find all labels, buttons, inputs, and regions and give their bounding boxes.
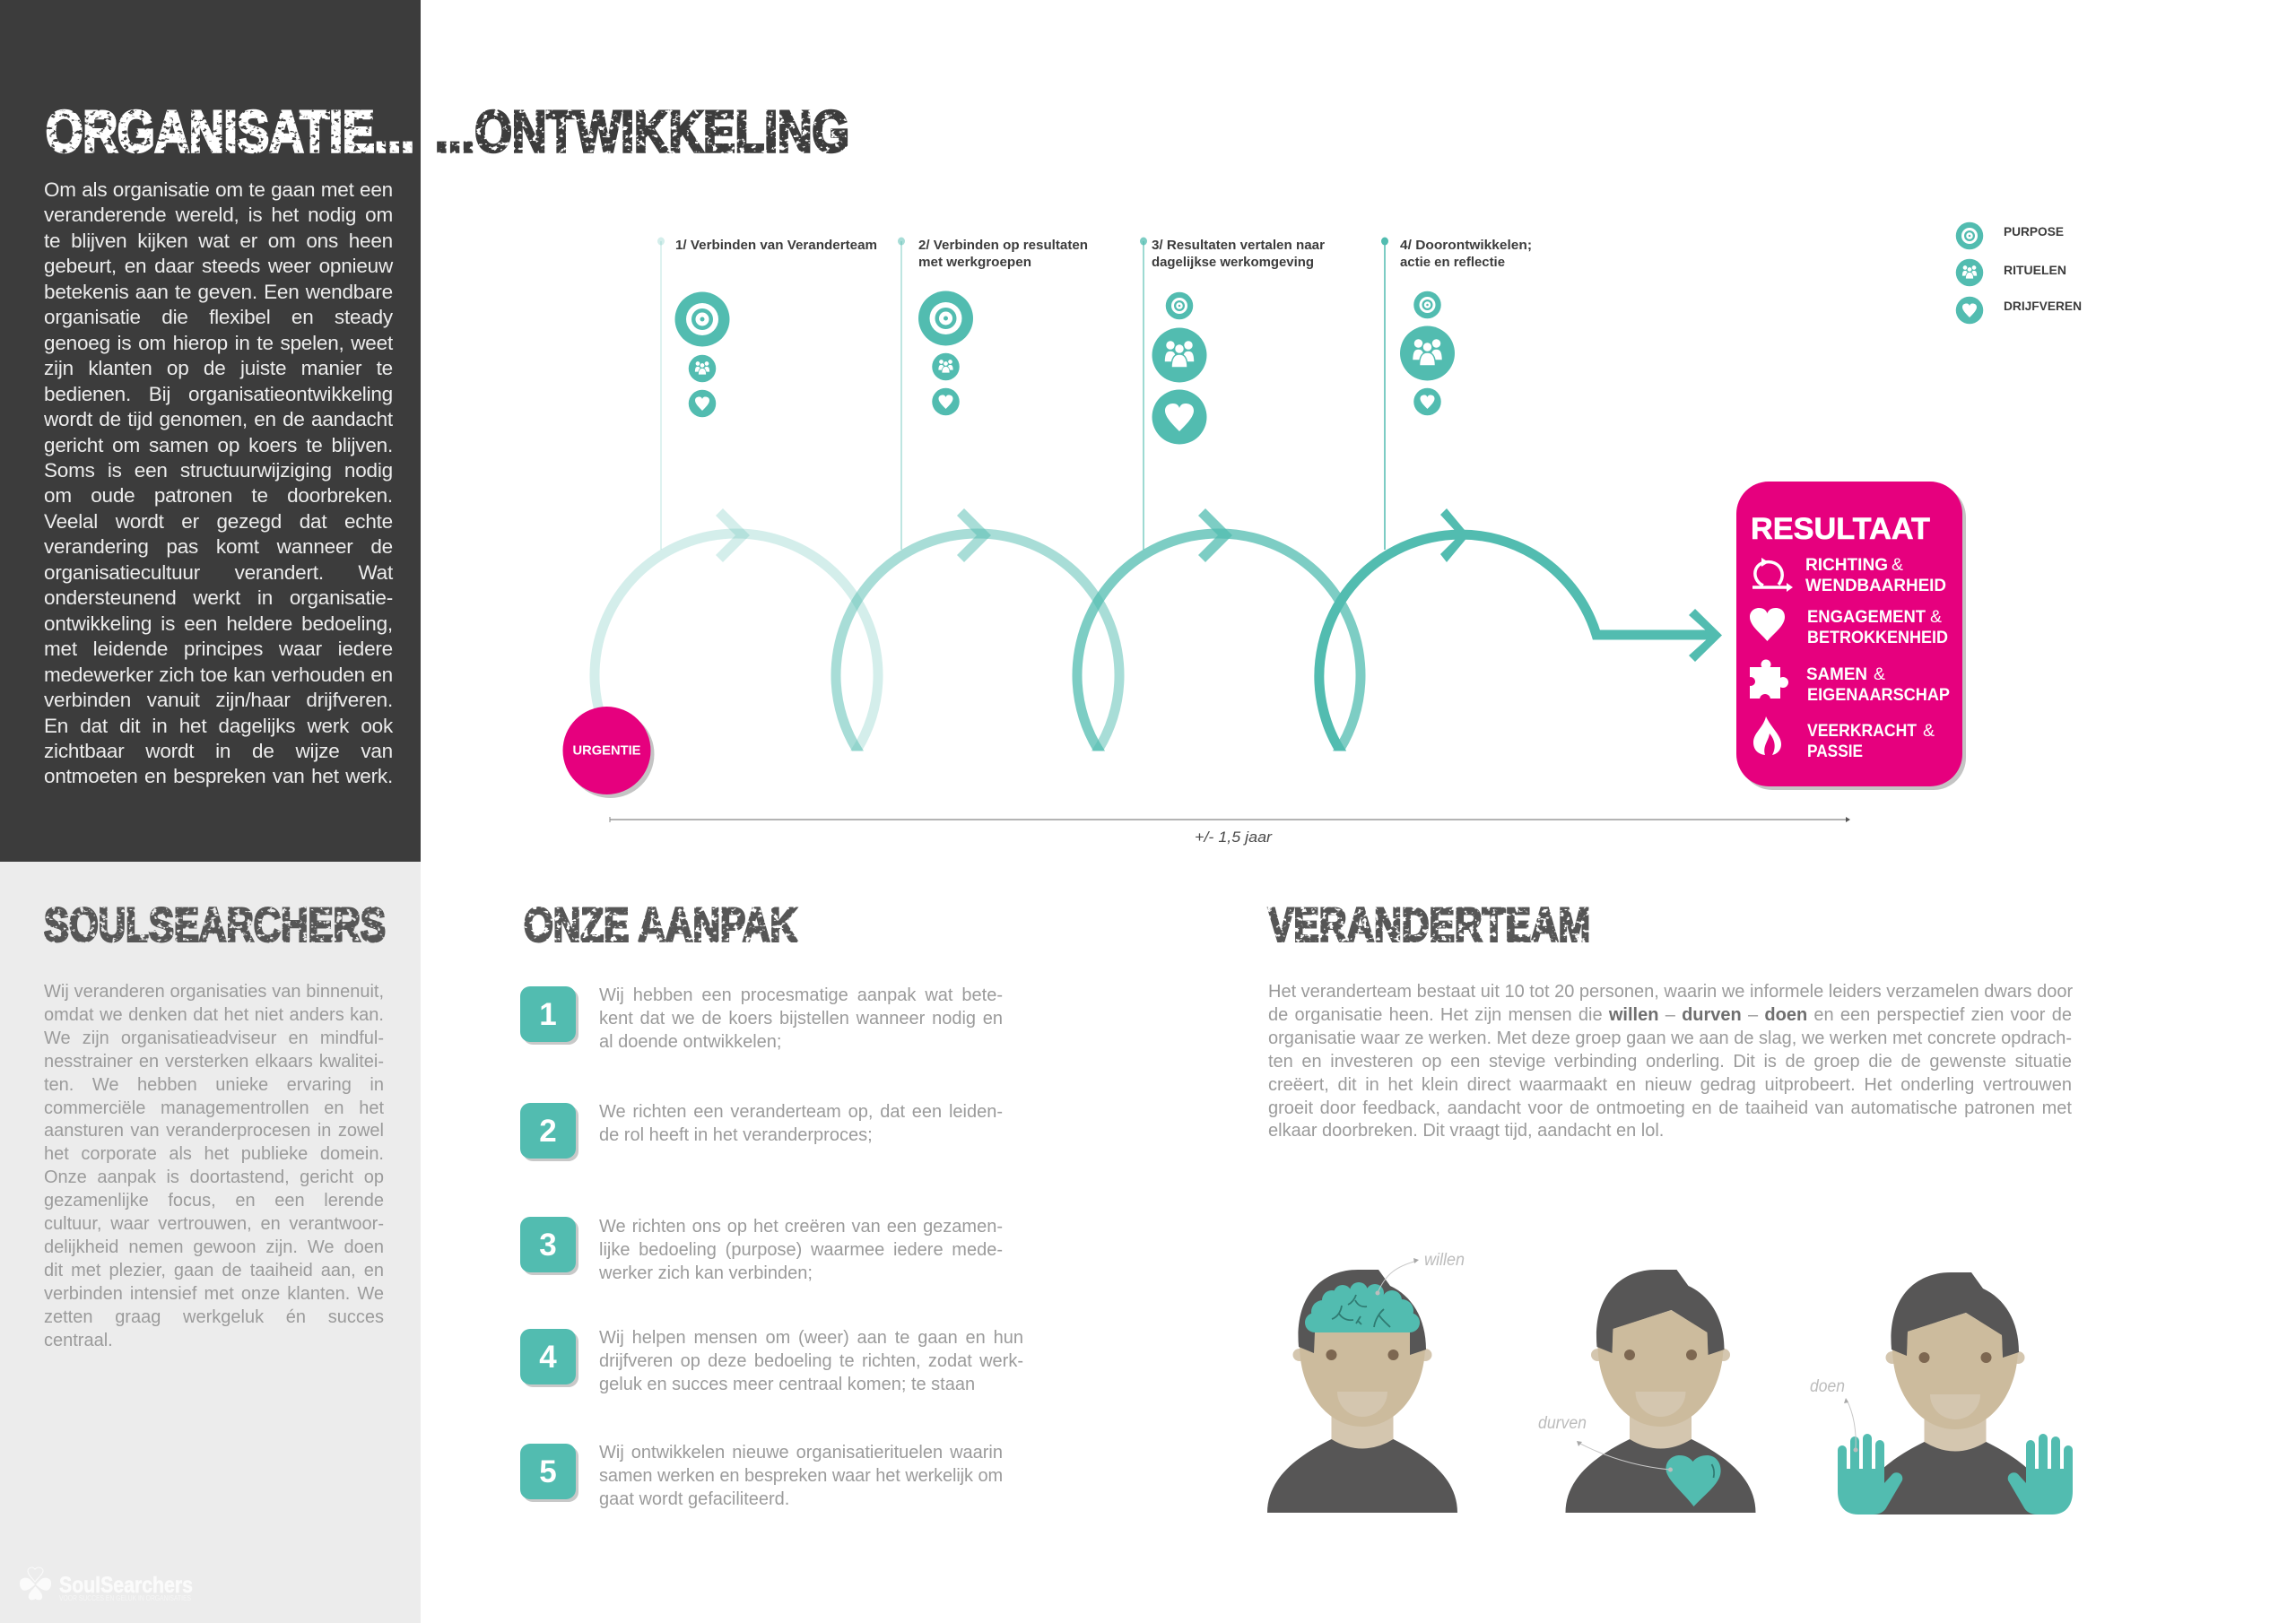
timeline axis: +/- 1,5 jaar bbox=[1195, 829, 1273, 846]
result: engagement: BETROKKENHEID bbox=[1807, 628, 1948, 647]
step labels: 2/ Verbinden op resultaten bbox=[918, 238, 1088, 253]
text: soulsearchers paragraph: zetten graag werkgeluk én succes bbox=[44, 1307, 384, 1327]
urgentie badge: URGENTIE bbox=[572, 742, 640, 759]
heading: VERANDERTEAM: VERANDERTEAM bbox=[1268, 898, 1590, 952]
step labels: 1/ Verbinden van Veranderteam bbox=[675, 238, 877, 253]
loop 4 with exit arrow bbox=[1319, 508, 1722, 762]
text: soulsearchers paragraph: verbinden intensief met onze klanten. We bbox=[44, 1284, 384, 1304]
text: intro paragraph: organisatie die flexibel en steady bbox=[44, 306, 393, 328]
text: intro paragraph: organisatiecultuur verandert. Wat bbox=[44, 561, 393, 584]
text: aanpak step 1 bbox=[599, 985, 1003, 1052]
number badge 5 bbox=[520, 1444, 578, 1502]
step 1: timeline marker bbox=[657, 237, 665, 550]
number badge 5: 5 bbox=[539, 1454, 557, 1489]
legend: PURPOSE bbox=[2004, 224, 2064, 239]
text: aanpak step 5: samen werken en bespreken waar het werkelijk om bbox=[599, 1466, 1003, 1486]
legend: DRIJFVEREN bbox=[2004, 299, 2082, 313]
result: samen: & bbox=[1874, 665, 1885, 684]
step labels bbox=[675, 238, 1532, 270]
number badge 1: 1 bbox=[539, 997, 557, 1032]
text: intro paragraph: gericht om samen op koers te blijven. bbox=[44, 434, 393, 456]
left hand bbox=[1838, 1434, 1902, 1515]
person 3: doen (hands) bbox=[1860, 1272, 2050, 1515]
loop 2 bbox=[836, 508, 1119, 762]
annotation: durven: durven bbox=[1538, 1414, 1587, 1433]
result: richting: WENDBAARHEID bbox=[1805, 576, 1946, 595]
text: veranderteam paragraph: groeit door feedback, aandacht voor de ontmoeting en de taaiheid van automatische patronen met bbox=[1268, 1098, 2072, 1118]
clover icon bbox=[20, 1567, 51, 1600]
text: aanpak step 3: werker zich kan verbinden; bbox=[599, 1263, 813, 1283]
result: veerkracht: PASSIE bbox=[1807, 742, 1863, 761]
icons: step 3 bbox=[1152, 292, 1207, 445]
text: intro paragraph: ontmoeten en bespreken van het werk. bbox=[44, 765, 393, 787]
text: intro paragraph: Veelal wordt er gezegd dat echte bbox=[44, 510, 393, 533]
text: intro paragraph: zichtbaar wordt in de wijze van bbox=[44, 740, 393, 762]
text: aanpak step 3 bbox=[599, 1217, 1003, 1283]
step 3: timeline marker bbox=[1140, 237, 1147, 550]
step labels: dagelijkse werkomgeving bbox=[1152, 255, 1314, 270]
step labels: 4/ Doorontwikkelen; bbox=[1400, 238, 1532, 253]
heart bbox=[1666, 1455, 1721, 1506]
icons: step 2 bbox=[918, 291, 973, 415]
text: veranderteam paragraph: de organisatie heen. Het zijn mensen die willen – durven – doen en een perspectief zien voor de bbox=[1268, 1005, 2072, 1025]
text: aanpak step 3: We richten ons op het creëren van een gezamen- bbox=[599, 1217, 1003, 1237]
text: intro paragraph: om oude patronen te doorbreken. bbox=[44, 484, 393, 507]
text: soulsearchers paragraph: commerciële managementrollen en het bbox=[44, 1098, 384, 1118]
urgentie badge bbox=[563, 707, 655, 798]
heading: ONZE AANPAK: ONZE AANPAK bbox=[524, 898, 797, 952]
text: intro paragraph: verbinden vanuit zijn/haar drijfveren. bbox=[44, 689, 393, 711]
text: intro paragraph: met leidende principes waar iedere bbox=[44, 638, 393, 660]
text: soulsearchers paragraph: dit met plezier, gaan de taaiheid aan, en bbox=[44, 1261, 384, 1280]
text: intro paragraph: medewerker zich toe kan verhouden en bbox=[44, 664, 393, 686]
text: intro paragraph: ondersteunend werkt in organisatie- bbox=[44, 586, 393, 609]
text: soulsearchers paragraph: nesstrainer en versterken elkaars kwalitei- bbox=[44, 1052, 384, 1072]
icons: step 1 bbox=[674, 292, 730, 417]
title: ORGANISATIE...: ORGANISATIE... bbox=[46, 99, 414, 164]
text: soulsearchers paragraph: gezamenlijke focus, en een lerende bbox=[44, 1191, 384, 1211]
text: aanpak step 2: We richten een veranderteam op, dat een leiden- bbox=[599, 1102, 1003, 1122]
text: soulsearchers paragraph: omdat we denken dat het niet anders kan. bbox=[44, 1005, 384, 1025]
result: samen: SAMEN bbox=[1806, 664, 1867, 684]
text: soulsearchers paragraph: cultuur, waar vertrouwen, en verantwoor- bbox=[44, 1214, 384, 1234]
result: richting: RICHTING bbox=[1805, 555, 1888, 575]
annotation: willen: willen bbox=[1424, 1251, 1465, 1270]
text: veranderteam paragraph: organisatie waar ze werken. Met deze groep gaan we aan de slag, we werken met concrete opdrach- bbox=[1268, 1028, 2072, 1048]
text: aanpak step 4: Wij helpen mensen om (weer) aan te gaan en hun bbox=[599, 1328, 1023, 1348]
title: ...ONTWIKKELING: ...ONTWIKKELING bbox=[435, 99, 849, 164]
text: soulsearchers paragraph bbox=[44, 982, 384, 1350]
result: richting bbox=[1752, 555, 1946, 595]
text: aanpak step 1: kent dat we de koers bijstellen wanneer nodig en bbox=[599, 1009, 1003, 1028]
person 2: durven (heart) bbox=[1566, 1270, 1756, 1513]
result: richting: & bbox=[1892, 556, 1903, 575]
text: aanpak step 5: gaat wordt gefaciliteerd. bbox=[599, 1489, 789, 1509]
result: veerkracht: & bbox=[1923, 722, 1935, 741]
result: veerkracht: VEERKRACHT bbox=[1807, 721, 1917, 741]
text: aanpak step 5: Wij ontwikkelen nieuwe organisatierituelen waarin bbox=[599, 1443, 1003, 1462]
loop 1 bbox=[595, 508, 878, 762]
text: veranderteam paragraph bbox=[1268, 982, 2073, 1141]
text: aanpak step 1: al doende ontwikkelen; bbox=[599, 1032, 781, 1052]
annotation: doen: doen bbox=[1810, 1377, 1845, 1396]
result: engagement bbox=[1750, 607, 1948, 647]
spiral arrow: four loops bbox=[595, 508, 1722, 762]
result: engagement: & bbox=[1930, 608, 1942, 627]
step labels: actie en reflectie bbox=[1400, 255, 1505, 270]
resultaat card: RESULTAAT bbox=[1751, 512, 1930, 546]
number badge 4 bbox=[520, 1329, 578, 1387]
result: engagement: ENGAGEMENT bbox=[1807, 607, 1926, 627]
text: veranderteam paragraph: Het veranderteam bestaat uit 10 tot 20 personen, waarin we informele leiders verzamelen dwars door bbox=[1268, 982, 2073, 1002]
panel: dark intro sidebar bbox=[0, 0, 421, 862]
text: soulsearchers paragraph: centraal. bbox=[44, 1331, 113, 1350]
text: soulsearchers paragraph: ten. We hebben unieke ervaring in bbox=[44, 1075, 384, 1095]
step 2: timeline marker bbox=[898, 237, 905, 550]
number badge 1 bbox=[520, 986, 578, 1045]
step 4: timeline marker bbox=[1381, 237, 1388, 550]
loop 3 bbox=[1077, 508, 1361, 762]
text: intro paragraph: Soms is een structuurwijziging nodig bbox=[44, 459, 393, 482]
text: intro paragraph: te blijven kijken wat er om ons heen bbox=[44, 230, 393, 252]
text: intro paragraph: verandering pas komt wanneer de bbox=[44, 535, 393, 558]
text: aanpak step 4: geluk en succes meer centraal komen; te staan bbox=[599, 1375, 975, 1394]
text: aanpak step 5 bbox=[599, 1443, 1003, 1509]
result: samen: EIGENAARSCHAP bbox=[1807, 685, 1950, 705]
text: aanpak step 2 bbox=[599, 1102, 1003, 1145]
text: intro paragraph: gebeurt, en daar steeds weer opnieuw bbox=[44, 255, 393, 277]
icons: step 4 bbox=[1400, 291, 1455, 415]
text: aanpak step 2: de rol heeft in het veranderproces; bbox=[599, 1125, 873, 1145]
number badge 2 bbox=[520, 1103, 578, 1161]
step labels: 3/ Resultaten vertalen naar bbox=[1152, 238, 1325, 253]
text: soulsearchers paragraph: delijkheid nemen gewoon zijn. We doen bbox=[44, 1237, 384, 1257]
person 1: willen (brain) bbox=[1267, 1270, 1457, 1513]
text: soulsearchers paragraph: Onze aanpak is doortastend, gericht op bbox=[44, 1167, 384, 1187]
text: soulsearchers paragraph: We zijn organisatieadviseur en mindful- bbox=[44, 1028, 384, 1048]
text: veranderteam paragraph: creëert, dit in het klein direct waarmaakt en nieuw gedrag uitprobeert. Het onderling vertrouwen bbox=[1268, 1075, 2072, 1095]
annotation: durven bbox=[1538, 1414, 1673, 1472]
number badge 3 bbox=[520, 1217, 578, 1275]
text: intro paragraph bbox=[44, 178, 393, 787]
text: intro paragraph: ontwikkeling is een heldere bedoeling, bbox=[44, 612, 393, 635]
text: veranderteam paragraph: elkaar doorbreken. Dit vraagt tijd, aandacht en lol. bbox=[1268, 1121, 1664, 1141]
text: intro paragraph: zijn klanten op de juiste manier te bbox=[44, 357, 393, 379]
text: intro paragraph: En dat dit in het dagelijks werk ook bbox=[44, 715, 393, 737]
text: intro paragraph: genoeg is om hierop in te spelen, weet bbox=[44, 332, 393, 354]
text: intro paragraph: Om als organisatie om te gaan met een bbox=[44, 178, 393, 201]
text: aanpak step 3: lijke bedoeling (purpose) waarmee iedere mede- bbox=[599, 1240, 1003, 1260]
text: intro paragraph: wordt de tijd genomen, en de aandacht bbox=[44, 408, 393, 430]
legend bbox=[1956, 222, 2082, 324]
text: soulsearchers paragraph: het corporate als het publieke domein. bbox=[44, 1144, 384, 1164]
logo: SoulSearchers: SoulSearchers bbox=[59, 1573, 193, 1598]
text: intro paragraph: veranderende wereld, is het nodig om bbox=[44, 204, 393, 226]
text: aanpak step 4 bbox=[599, 1328, 1023, 1394]
resultaat card bbox=[1736, 482, 1966, 790]
annotation: willen bbox=[1376, 1251, 1465, 1295]
logo: SoulSearchers bbox=[20, 1567, 193, 1602]
text: aanpak step 4: drijfveren op deze bedoeling te richten, zodat werk- bbox=[599, 1351, 1023, 1371]
text: veranderteam paragraph: ten en investeren op een stevige verbinding onderling. Dit is de groep die de gewenste situatie bbox=[1268, 1052, 2072, 1072]
heading: SOULSEARCHERS: SOULSEARCHERS bbox=[44, 898, 386, 952]
panel: light grey sidebar bbox=[0, 862, 421, 1623]
text: intro paragraph: bedienen. Bij organisatieontwikkeling bbox=[44, 383, 393, 405]
annotation: doen bbox=[1810, 1377, 1858, 1453]
result: samen bbox=[1746, 660, 1950, 705]
number badge 2: 2 bbox=[539, 1114, 557, 1149]
logo: SoulSearchers: VOOR SUCCES EN GELUK IN ORGANISATIES bbox=[59, 1594, 191, 1602]
text: intro paragraph: betekenis aan te geven. Een wendbare bbox=[44, 281, 393, 303]
number badge 3: 3 bbox=[539, 1228, 557, 1263]
right hand bbox=[2008, 1434, 2073, 1515]
legend: RITUELEN bbox=[2004, 263, 2066, 277]
text: soulsearchers paragraph: Wij veranderen organisaties van binnenuit, bbox=[44, 982, 384, 1002]
brain bbox=[1305, 1282, 1420, 1332]
timeline axis bbox=[610, 817, 1850, 846]
step labels: met werkgroepen bbox=[918, 255, 1031, 270]
text: soulsearchers paragraph: aansturen van veranderprocesen in zowel bbox=[44, 1121, 384, 1141]
result: veerkracht bbox=[1753, 716, 1935, 761]
text: aanpak step 1: Wij hebben een procesmatige aanpak wat bete- bbox=[599, 985, 1003, 1005]
number badge 4: 4 bbox=[539, 1340, 557, 1375]
